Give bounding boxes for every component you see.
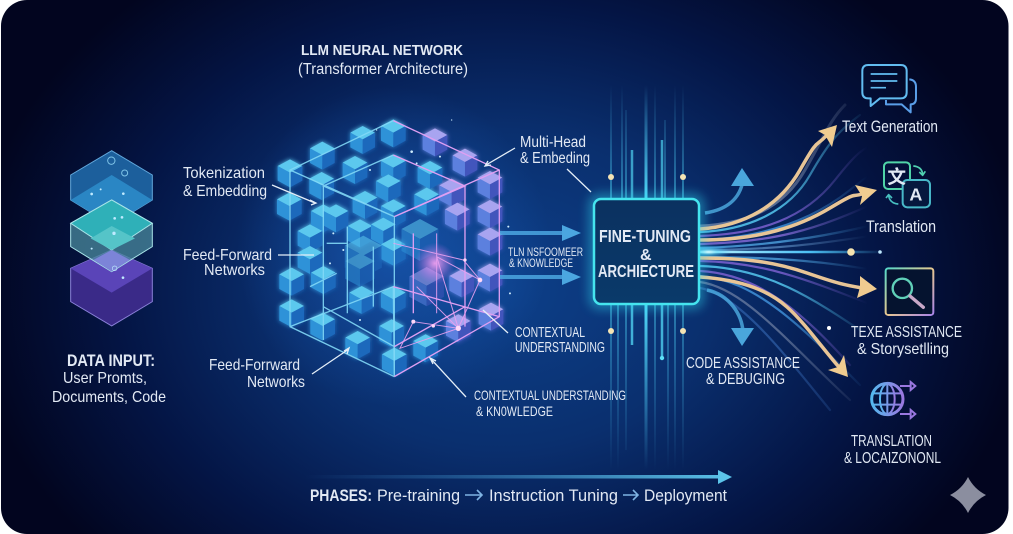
fine-tuning chip: ARCHIECTURE bbox=[598, 261, 694, 281]
label: code assistance: CODE ASSISTANCE bbox=[686, 355, 800, 372]
data input label: DATA INPUT: bbox=[67, 352, 155, 370]
label: text assistance bbox=[851, 324, 962, 358]
label: text assistance: & Storysetlling bbox=[857, 341, 949, 358]
small cubes bbox=[277, 119, 503, 376]
center stream line bbox=[697, 251, 885, 253]
network title: (Transformer Architecture) bbox=[298, 61, 468, 78]
vertical glow lines bbox=[608, 85, 686, 470]
icon: translation: A bbox=[909, 185, 922, 205]
label: contextual understanding and knowledge: & KN0WLEDGE bbox=[476, 403, 553, 419]
stack particles bbox=[90, 188, 125, 279]
label: text generation: Text Generation bbox=[842, 118, 938, 136]
label: feed-forward lower: Feed-Forrward bbox=[209, 357, 300, 374]
network title: LLM NEURAL NETWORK bbox=[301, 42, 463, 59]
label: translation and localization: & LOCAIZONONL bbox=[844, 450, 941, 467]
input arrows to chip bbox=[500, 225, 581, 285]
data input label bbox=[52, 352, 166, 406]
particles bbox=[329, 119, 511, 321]
output arrows bbox=[700, 125, 877, 377]
label: contextual understanding: UNDERSTANDING bbox=[515, 340, 605, 356]
blue branch arrows bbox=[705, 168, 754, 346]
label: translation: Translation bbox=[866, 218, 936, 236]
bottom layer bbox=[71, 250, 152, 326]
phases text: Instruction Tuning bbox=[489, 486, 618, 505]
network title bbox=[298, 42, 468, 78]
label: feed-forward upper: Feed-Forward bbox=[183, 247, 272, 264]
label: transformer and knowledge: TLN NSFOOMEER bbox=[508, 247, 583, 259]
label: code assistance bbox=[686, 355, 800, 388]
icon: sparkle watermark bbox=[950, 477, 986, 513]
label: text assistance: TEXE ASSISTANCE bbox=[851, 324, 962, 341]
stream fan to outputs bbox=[700, 104, 863, 411]
middle layer bbox=[71, 200, 152, 272]
pink attention core bbox=[393, 233, 482, 348]
label: transformer and knowledge: & KNOWLEDGE bbox=[509, 258, 573, 270]
phases text: Deployment bbox=[644, 486, 727, 505]
wireframe cage bbox=[290, 121, 499, 377]
translucent core cubes bbox=[345, 219, 444, 306]
data input stack icon bbox=[71, 151, 152, 326]
icon: translation: 文 bbox=[887, 166, 906, 187]
fine-tuning chip: FINE-TUNING bbox=[599, 226, 691, 246]
label: feed-forward lower bbox=[209, 357, 305, 391]
phases text bbox=[310, 486, 727, 505]
label: feed-forward lower: Networks bbox=[247, 374, 305, 391]
label: translation and localization bbox=[844, 433, 941, 467]
callout lines bbox=[272, 148, 591, 397]
phases arrow bbox=[305, 470, 732, 484]
phases text: PHASES: bbox=[310, 486, 372, 505]
neural network cube bbox=[237, 87, 550, 407]
label: tokenization: & Embedding bbox=[183, 183, 267, 200]
label: contextual understanding and knowledge bbox=[474, 387, 626, 419]
data input label: User Promts, bbox=[63, 370, 147, 387]
label: contextual understanding: CONTEXTUAL bbox=[515, 325, 585, 341]
top layer bbox=[71, 151, 152, 225]
label: code assistance: & DEBUGING bbox=[706, 371, 785, 388]
label: multi-head: & Embeding bbox=[520, 150, 590, 167]
label: translation and localization: TRANSLATION bbox=[851, 433, 932, 450]
icon: search bbox=[886, 268, 933, 315]
fine-tuning chip bbox=[588, 193, 705, 310]
label: feed-forward upper: Networks bbox=[204, 262, 265, 279]
icon: chat bubbles bbox=[862, 65, 916, 112]
label: tokenization: Tokenization bbox=[183, 165, 265, 182]
label: multi-head: Multi-Head bbox=[520, 134, 586, 151]
label: contextual understanding bbox=[515, 325, 605, 356]
icon: translation bbox=[884, 162, 930, 207]
label: multi-head bbox=[520, 134, 590, 167]
label: tokenization bbox=[183, 165, 267, 200]
center line dots bbox=[827, 248, 882, 330]
label: contextual understanding and knowledge: CONTEXTUAL UNDERSTANDING bbox=[474, 387, 626, 403]
label: transformer and knowledge bbox=[508, 247, 583, 270]
chip exit glow bbox=[684, 245, 732, 259]
label: feed-forward upper bbox=[183, 247, 272, 279]
fine-tuning chip: & bbox=[640, 247, 652, 264]
phases text: Pre-training bbox=[377, 486, 460, 505]
data input label: Documents, Code bbox=[52, 389, 166, 406]
icon: globe bbox=[872, 382, 915, 418]
